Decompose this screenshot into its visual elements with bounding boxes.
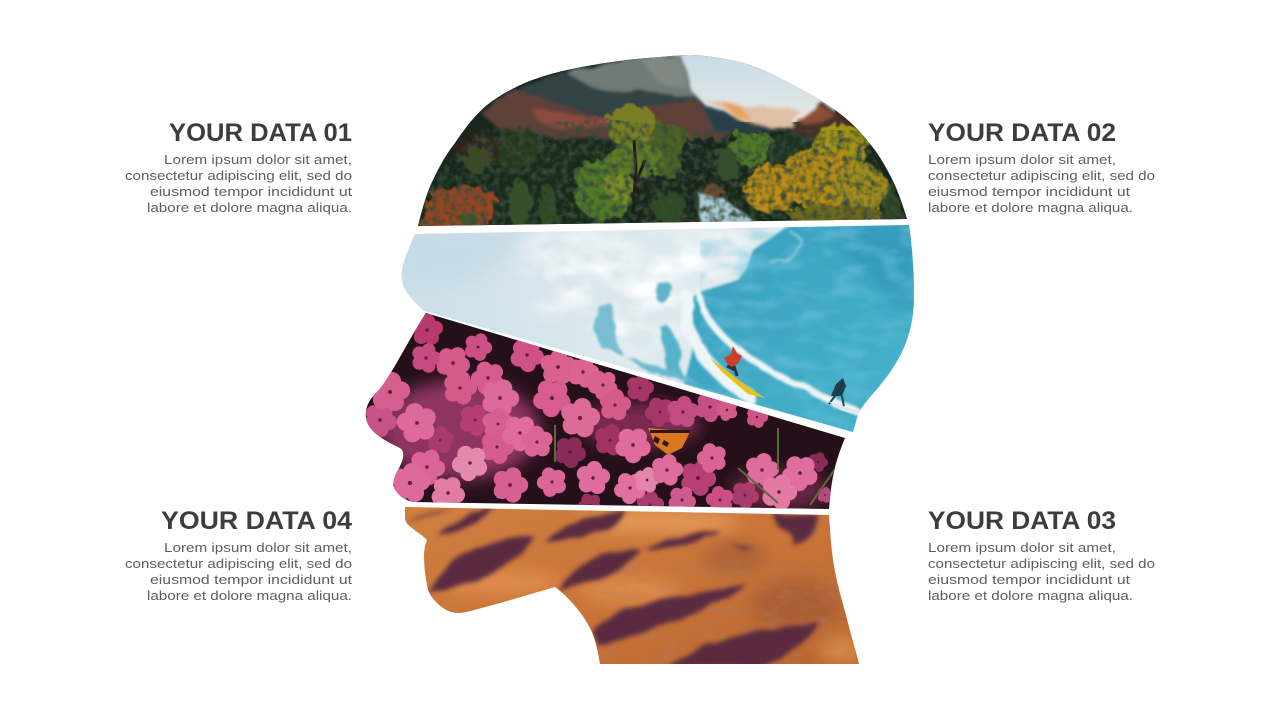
text block: YOUR DATA 03 <box>928 507 1155 603</box>
text block: YOUR DATA 04 <box>125 507 352 603</box>
dark magenta undergrowth <box>380 380 830 510</box>
sand ripples <box>600 560 860 664</box>
sky <box>655 52 835 122</box>
trunk <box>632 140 645 222</box>
body 04: consectetur adipiscing elit, sed do <box>125 556 352 571</box>
sky haze <box>406 232 523 278</box>
head silhouette infographic <box>358 52 920 668</box>
blue wave face <box>684 222 920 440</box>
butterfly <box>648 428 690 455</box>
panel: desert dunes photo segment (chin and neck) <box>400 504 864 668</box>
body 01 <box>125 152 352 215</box>
heading 04: YOUR DATA 04 <box>161 507 352 535</box>
panel: surfing wave photo segment (brow to jaw) <box>400 222 920 440</box>
panel: mountain forest photo segment (top of head) <box>415 52 910 230</box>
body 04 <box>125 540 352 603</box>
body 02 <box>928 152 1155 215</box>
heading 03: YOUR DATA 03 <box>928 507 1116 535</box>
body 02: consectetur adipiscing elit, sed do <box>928 168 1155 183</box>
foliage speckle <box>416 118 910 228</box>
body 04: labore et dolore magna aliqua. <box>147 588 352 603</box>
body 02: eiusmod tempor incididunt ut <box>928 184 1130 199</box>
flower clusters <box>358 313 835 521</box>
foam streaks <box>686 232 858 411</box>
stems <box>555 425 840 505</box>
body 03: consectetur adipiscing elit, sed do <box>928 556 1155 571</box>
surfer 1 <box>710 346 765 398</box>
body 02: Lorem ipsum dolor sit amet, <box>928 152 1116 167</box>
heading 02: YOUR DATA 02 <box>928 119 1116 147</box>
body 01: labore et dolore magna aliqua. <box>147 200 352 215</box>
body 01: consectetur adipiscing elit, sed do <box>125 168 352 183</box>
light and dark sand tones <box>440 512 864 664</box>
body 02: labore et dolore magna aliqua. <box>928 200 1133 215</box>
foam texture <box>520 231 751 338</box>
body 04: Lorem ipsum dolor sit amet, <box>164 540 352 555</box>
blue gaps in the foam <box>594 283 700 385</box>
body 01: eiusmod tempor incididunt ut <box>150 184 352 199</box>
body 01: Lorem ipsum dolor sit amet, <box>164 152 352 167</box>
body 03 <box>928 540 1155 603</box>
text block: YOUR DATA 02 <box>928 119 1155 215</box>
trees and ground <box>416 104 900 230</box>
surfer 2 <box>828 378 859 416</box>
body 03: labore et dolore magna aliqua. <box>928 588 1133 603</box>
body 03: Lorem ipsum dolor sit amet, <box>928 540 1116 555</box>
river <box>697 192 755 224</box>
cliff and slopes <box>480 54 870 150</box>
panel: pink flowers photo segment (nose and mouth) <box>358 310 850 521</box>
heading 01: YOUR DATA 01 <box>169 119 352 147</box>
text block: YOUR DATA 01 <box>125 119 352 215</box>
body 04: eiusmod tempor incididunt ut <box>150 572 352 587</box>
body 03: eiusmod tempor incididunt ut <box>928 572 1130 587</box>
dune shadows <box>406 507 820 668</box>
